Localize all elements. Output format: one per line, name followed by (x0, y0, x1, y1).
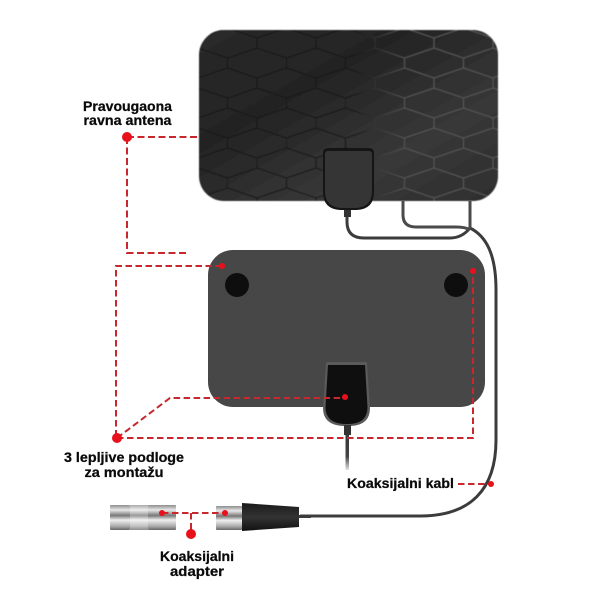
label: flat antenna: ravna antena (84, 113, 172, 128)
label: coaxial cable: Koaksijalni kabl (347, 476, 454, 491)
label: coaxial adapter: adapter (170, 564, 225, 579)
F connector plug (216, 503, 311, 531)
adhesive pad right (444, 273, 468, 297)
antenna wire loop (403, 201, 470, 230)
rear connector (323, 362, 370, 470)
label: flat antenna (83, 99, 173, 128)
callout lines: adapter (159, 510, 228, 539)
label: coaxial adapter (160, 549, 234, 579)
panel: flat antenna back (208, 250, 485, 407)
callout lines: flat antenna (122, 132, 199, 253)
panel: flat antenna front (199, 30, 498, 201)
coaxial cable (300, 212, 496, 516)
label: adhesive pads (64, 450, 185, 480)
adhesive pad left (225, 273, 249, 297)
label: adhesive pads: za montažu (84, 465, 164, 480)
callout lines: adhesive pads (112, 263, 476, 443)
label: adhesive pads: 3 lepljive podloge (64, 450, 185, 465)
label: coaxial adapter: Koaksijalni (160, 549, 234, 564)
antenna connector block (323, 148, 374, 217)
coaxial adapter (110, 505, 176, 530)
label: flat antenna: Pravougaona (83, 99, 173, 114)
callout line: coaxial cable (458, 481, 494, 487)
